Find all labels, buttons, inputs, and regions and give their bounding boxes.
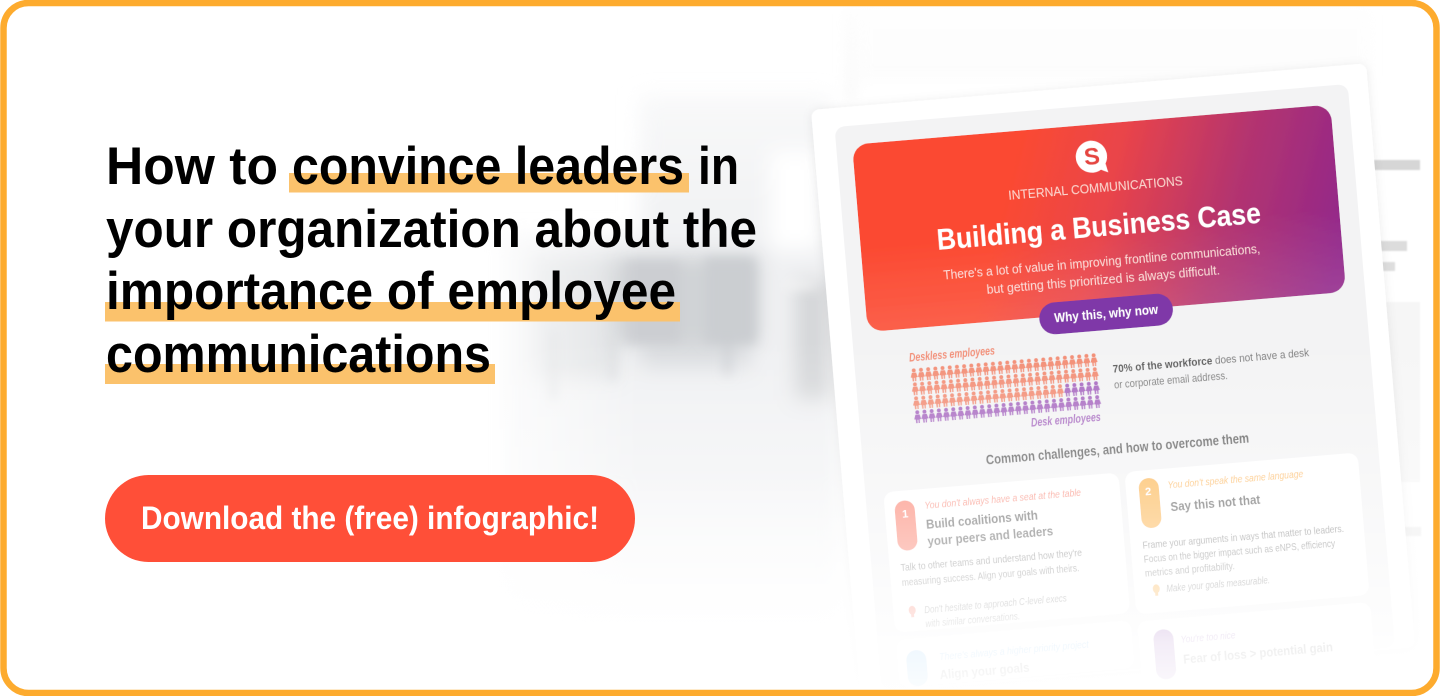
header subtitle: There's a lot of value in improving frontline communications, [943,241,1261,282]
background: blurred office photo [527,117,836,490]
preview: section heading: Common challenges, and how to overcome them [985,431,1250,468]
download button: Download the (free) infographic! [141,500,599,536]
background: blurred page behind the infographic [1366,160,1421,536]
card 3: There's always a higher priority project [939,639,1090,663]
card 4 [1137,602,1376,693]
heading text: importance of employee [106,262,676,321]
card 1: Don't hesitate to approach C-level execs [924,593,1067,616]
card 1: You don't always have a seat at the table [924,487,1082,512]
preview: purple pill [1038,292,1174,336]
preview: purple pill: Why this, why now [1054,303,1159,325]
highlight: importance of employee [105,302,680,322]
preview: workforce statistic: 70% of the workforce does not have a desk [1112,347,1310,376]
preview: workforce statistic: or corporate email address. [1114,370,1228,392]
card 1: measuring success. Align your goals with theirs. [901,562,1080,589]
header title: Building a Business Case [935,197,1262,257]
header eyebrow: INTERNAL COMMUNICATIONS [1008,173,1184,203]
highlight: convince leaders [289,173,689,192]
highlight: communications [105,364,495,384]
card 4: You're too nice [1180,629,1236,646]
header subtitle: but getting this prioritized is always difficult. [986,262,1220,297]
label: deskless: Deskless employees [909,345,995,365]
card 2: Make your goals measurable. [1166,575,1270,595]
card 2 [1124,452,1370,615]
preview: grey page [835,84,1395,690]
card 2: 2 [1145,486,1152,498]
infographic preview [811,63,1417,696]
card 3: Align your goals [939,660,1030,682]
preview: white sheet [811,63,1415,694]
preview: workforce statistic [1112,347,1311,392]
preview: gradient header [852,105,1346,332]
card 4: Fear of loss > potential gain [1183,639,1333,667]
card 2: Frame your arguments in ways that matter to leaders. [1142,523,1344,552]
heading text: in [698,137,739,196]
card 1: Talk to other teams and understand how they're [900,547,1083,574]
card 1: your peers and leaders [927,523,1054,549]
heading text: convince leaders [292,137,684,196]
card 1 [883,473,1130,633]
heading text: your organization about the [106,200,757,259]
header subtitle [943,241,1262,300]
card 2: Focus on the bigger impact such as eNPS, efficiency [1143,538,1336,566]
heading text: How to [106,137,278,196]
icon: speech bubble logo: S [1083,143,1101,171]
icon: speech bubble logo [1075,139,1108,175]
label: desk: Desk employees [1031,412,1101,430]
card 2: metrics and profitability. [1144,560,1235,580]
card 1: with similar conversations. [925,611,1021,630]
heading [105,137,757,384]
heading text: communications [106,325,491,384]
card 1: 1 [902,508,909,521]
card 2: You don't speak the same language [1167,468,1304,491]
card 1: Build coalitions with [925,507,1038,532]
card 3 [896,620,1135,688]
heading text [106,137,757,384]
download button [105,475,635,562]
bottom white fade over preview [0,340,1440,696]
preview: workforce pictogram [909,337,1103,439]
card 2: Say this not that [1170,492,1261,514]
